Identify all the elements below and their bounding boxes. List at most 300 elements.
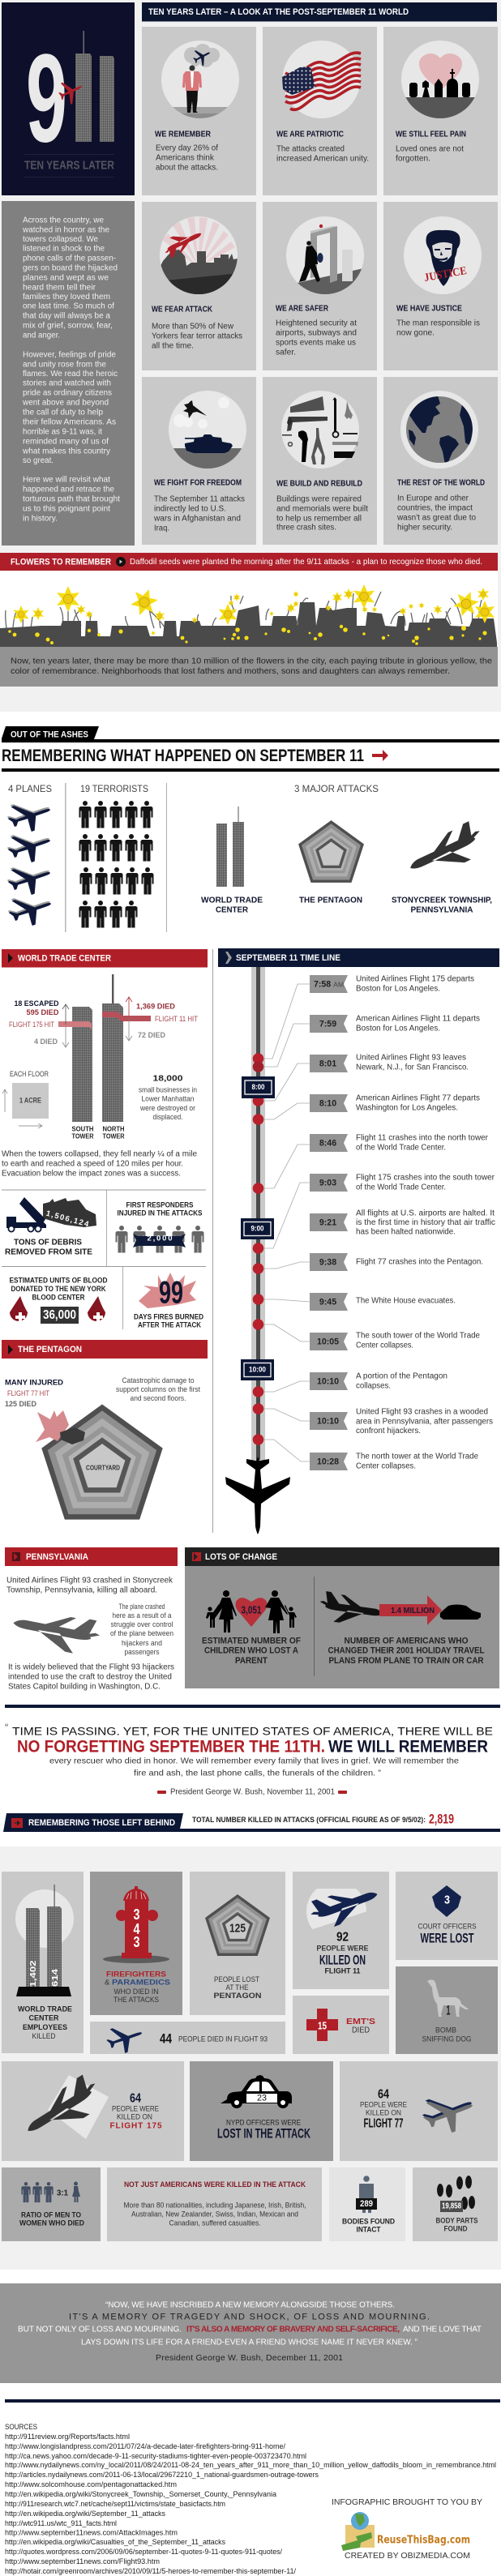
labels: attack sites: THE PENTAGON — [299, 896, 362, 905]
text block: intro narrative: pride as ordinary citizens — [23, 389, 112, 397]
event 10:05: The south tower of the World Trade — [356, 1331, 481, 1341]
chart: towers impact diagram: TOWER — [102, 1133, 125, 1140]
tile: wtc employees: WORLD TRADE — [18, 2005, 73, 2013]
text: the rest of the world — [396, 478, 485, 532]
tile: body parts found: 19,858 — [442, 2202, 461, 2211]
text: we fight for freedom: indirectly led to U.S. — [154, 504, 226, 514]
text block: sources: http://quotes.wordpress.com/2006/09/06/september-11-quotes-9-11-quotes-911-quotes/ — [5, 2548, 282, 2556]
text: holiday travel change — [328, 1636, 485, 1666]
title subtitle: TEN YEARS LATER — [24, 159, 114, 172]
stat: first responders: FIRST RESPONDERS — [126, 1200, 193, 1209]
tile: flight 77 — [340, 2061, 498, 2161]
panel: we remember — [142, 27, 256, 195]
event 8:10 — [310, 1094, 480, 1112]
event 8:10: American Airlines Flight 77 departs — [356, 1094, 480, 1102]
text: we build and rebuild — [276, 480, 368, 532]
tile: bomb sniffing dog — [396, 1966, 498, 2054]
event 10:28: The north tower at the World Trade — [356, 1453, 479, 1461]
stat: tons of debris: REMOVED FROM SITE — [5, 1248, 92, 1256]
stat: small businesses: were destroyed or — [139, 1104, 195, 1112]
text block: intro narrative: the call of duty to help — [23, 409, 104, 417]
panel: 9/11 title — [2, 2, 135, 195]
text block: intro narrative: torturous path that brought — [23, 494, 120, 504]
event 7:59: 7:59 — [319, 1020, 336, 1029]
icon: portrait with justice stamp — [404, 216, 482, 294]
text: we fight for freedom: The September 11 attacks — [154, 494, 245, 504]
event 9:21: is the first time in history that air traffic — [356, 1218, 495, 1227]
tile: flight 11: FLIGHT 11 — [324, 1966, 361, 1976]
quote: george w. bush november 2001: NO FORGETTING SEPTEMBER THE 11TH. — [17, 1738, 325, 1756]
tile: not just americans: Australian, New Zealander, Swiss, Indian, Mexican and — [131, 2210, 298, 2218]
hour marker 10:00: 10:00 — [249, 1365, 266, 1375]
quote: george w. bush november 2001: President George W. Bush, November 11, 2001 — [170, 1788, 335, 1796]
credit: brought to you by: INFOGRAPHIC BROUGHT TO YOU BY — [332, 2497, 482, 2507]
tile: flight 93: PEOPLE DIED IN FLIGHT 93 — [178, 2035, 268, 2044]
stat: small businesses: 18,000 — [152, 1075, 183, 1083]
event 8:46: Flight 11 crashes into the north tower — [356, 1133, 489, 1143]
text: capitol belief: It is widely believed that the Flight 93 hijackers — [8, 1663, 174, 1671]
tile: not just americans: NOT JUST AMERICANS WERE KILLED IN THE ATTACK — [124, 2180, 306, 2189]
icon: red plane — [55, 76, 87, 107]
stat: small businesses — [139, 1075, 197, 1121]
chart: towers impact diagram: TOWER — [71, 1133, 94, 1140]
event 7:59 — [310, 1015, 480, 1033]
text block: flowers remembrance: color of remembrance. Neighborhoods that lost fathers and mothers, sons and daughters can always remember. — [11, 667, 450, 676]
stat: units of blood: ESTIMATED UNITS OF BLOOD — [10, 1276, 108, 1284]
text: we are patriotic: WE ARE PATRIOTIC — [276, 130, 344, 139]
tile: flight 77: 64 — [378, 2088, 389, 2101]
stat: first responders — [115, 1200, 204, 1253]
text: we remember: WE REMEMBER — [155, 130, 211, 139]
quote: george w. bush december 2001 — [0, 2283, 501, 2383]
tile: not just americans — [107, 2167, 322, 2241]
text block: intro narrative: that day will always be a — [23, 311, 111, 321]
text block: sources: http://www.longislandpress.com/2011/07/24/a-decade-later-firefighters-bring-911-home/ — [5, 2442, 285, 2450]
tile: wtc employees: CENTER — [29, 2013, 59, 2023]
labels: attack sites: PENNSYLVANIA — [410, 906, 473, 914]
hour marker 9:00 — [241, 1218, 274, 1239]
stat: first responders: INJURED IN THE ATTACKS — [117, 1208, 203, 1217]
tile: ratio of men to women: WOMEN WHO DIED — [19, 2218, 84, 2227]
icon: american flag — [282, 41, 361, 118]
text block: intro narrative: their fellow Americans. As — [23, 418, 116, 426]
labels: attack sites: CENTER — [216, 906, 249, 914]
text: we still feel pain: Loved ones are not — [396, 144, 464, 154]
text: we are patriotic: The attacks created — [276, 144, 345, 154]
text: we have justice: WE HAVE JUSTICE — [396, 305, 462, 313]
text: the rest of the world: higher security. — [397, 524, 452, 532]
chart: towers impact diagram: 72 DIED — [138, 1031, 165, 1039]
text: we fight for freedom — [153, 478, 245, 533]
event 10:28: Center collapses. — [356, 1462, 416, 1470]
event 10:10 flight 93 — [310, 1407, 493, 1436]
text block: intro narrative: planes and wept as we — [23, 274, 109, 282]
icon: pentagon impact diagram: COURTYARD — [86, 1464, 120, 1472]
tile: wtc employees: EMPLOYEES — [23, 2023, 68, 2032]
tile: bodies found intact: 289 — [360, 2199, 373, 2209]
chart: towers impact diagram: 595 DIED — [26, 1008, 59, 1016]
event 8:01 — [310, 1054, 469, 1072]
logo: reuse this bag — [341, 2512, 470, 2551]
text block: towers collapse: Evacuation below the impact zones was a success. — [2, 1169, 181, 1179]
tile: flight 77: KILLED ON — [366, 2109, 401, 2117]
tile: ratio of men to women: RATIO OF MEN TO — [21, 2210, 81, 2219]
stat: days fires burned: AFTER THE ATTACK — [138, 1320, 201, 1329]
event 10:10 flight 93: area in Pennsylvania, after passengers — [356, 1417, 493, 1427]
panel: september 11 time line — [218, 948, 499, 1534]
quote: george w. bush november 2001: WE WILL REMEMBER — [328, 1738, 488, 1756]
tile: flight 11: KILLED ON — [319, 1952, 366, 1968]
tile: pentagon losses: PENTAGON — [214, 1992, 261, 2000]
event 7:59: Boston for Los Angeles. — [356, 1025, 440, 1033]
panel: three major attacks: 3 MAJOR ATTACKS — [294, 783, 379, 794]
text: the rest of the world: In Europe and other — [397, 494, 469, 503]
diagram: one acre floor — [2, 1070, 49, 1128]
icon: pentagon impact diagram — [36, 1404, 163, 1520]
quote: george w. bush december 2001: IT'S A MEMORY OF TRAGEDY AND SHOCK, OF LOSS AND MOURNING. — [69, 2312, 430, 2321]
text: we build and rebuild: and memorials were built — [276, 504, 368, 514]
tile: emts — [293, 1996, 389, 2054]
stat: small businesses: Lower Manhattan — [141, 1094, 195, 1102]
text block: intro narrative: flames. We read the heroic — [23, 370, 118, 379]
icon: family with heart — [206, 1590, 297, 1633]
labels: attack sites — [201, 896, 492, 914]
event 9:03: Flight 175 crashes into the south tower — [356, 1174, 495, 1182]
event 9:45 — [310, 1293, 456, 1311]
icon: pennsylvania plane — [9, 1605, 103, 1658]
event 8:01: United Airlines Flight 93 leaves — [356, 1054, 466, 1062]
stat: first responders: 2,000 — [148, 1234, 172, 1243]
chart: towers impact diagram: 1,369 DIED — [136, 1002, 175, 1012]
title subtitle — [24, 154, 114, 178]
hour marker 10:00 — [241, 1359, 274, 1380]
icon: pentagon — [298, 820, 364, 883]
panel: world trade center — [2, 949, 208, 1329]
icon: tools — [281, 391, 359, 469]
chart: towers impact diagram: 18 ESCAPED — [15, 999, 59, 1008]
event 9:38 — [310, 1253, 483, 1271]
text block: sources — [5, 2423, 496, 2575]
heading: lots of change: LOTS OF CHANGE — [205, 1552, 277, 1562]
tile: body parts found: BODY PARTS — [436, 2216, 478, 2224]
text block: sources: http://www.solcomhouse.com/pentagonattacked.htm — [5, 2480, 177, 2488]
panel: lots of change — [185, 1547, 499, 1688]
tile: wtc employees — [2, 1872, 84, 2053]
text block: intro narrative: and anger. — [23, 331, 60, 340]
text block: intro narrative: horrible as 9-11 was, it — [23, 428, 102, 436]
heading: remembering those left behind: REMEMBERING THOSE LEFT BEHIND — [28, 1818, 175, 1828]
tile: flight 77: PEOPLE WERE — [360, 2101, 407, 2109]
text block: sources: http://en.wikipedia.org/wiki/Stonycreek_Township,_Somerset_County,_Pennsylvania — [5, 2490, 277, 2498]
tile: firefighters and paramedics: FIREFIGHTERS — [106, 1970, 166, 1979]
event 10:05: 10:05 — [317, 1337, 339, 1347]
labels: pentagon casualties: 125 DIED — [5, 1400, 36, 1408]
stat: units of blood: DONATED TO THE NEW YORK — [11, 1284, 106, 1293]
text: we still feel pain: forgotten. — [396, 154, 430, 164]
text block: intro narrative: gers on board the hijacked — [23, 264, 118, 272]
text: we remember — [155, 130, 218, 172]
quote: george w. bush december 2001: LAYS DOWN ITS LIFE FOR A FRIEND-EVEN A FRIEND WHOSE NAME IT NEVER KNEW. ” — [81, 2338, 418, 2347]
heading: pennsylvania — [5, 1547, 178, 1566]
event 10:10 pentagon — [310, 1371, 447, 1391]
event 9:38: 9:38 — [319, 1258, 336, 1268]
icon: heart and gravestones — [401, 41, 479, 122]
logo: reuse this bag: ReuseThisBag.com — [377, 2534, 470, 2547]
text block: intro narrative: went above and beyond — [22, 399, 109, 407]
text: we are safer: WE ARE SAFER — [276, 305, 328, 313]
event 8:46: 8:46 — [319, 1138, 336, 1148]
text: we are safer: airports, subways and — [276, 329, 357, 337]
text block: intro narrative: However, feelings of pride — [23, 350, 117, 360]
tile: firefighters and paramedics — [90, 1872, 182, 2015]
text: pentagon damage: Catastrophic damage to — [122, 1376, 195, 1384]
tile: bodies found intact — [329, 2167, 405, 2241]
text block: intro narrative: in history. — [23, 514, 58, 524]
heading: ten years later bar — [142, 2, 497, 21]
text: we remember: Every day 26% of — [156, 144, 218, 152]
stat: units of blood: 36,000 — [43, 1308, 76, 1322]
event 9:21: 9:21 — [319, 1217, 336, 1227]
panel: we build and rebuild — [263, 377, 377, 545]
tile: nypd officers: NYPD OFFICERS WERE — [226, 2119, 301, 2127]
tile: nypd officers: LOST IN THE ATTACK — [217, 2125, 310, 2142]
text: we build and rebuild: to help us remember all — [276, 514, 362, 524]
tile: court officers: WERE LOST — [420, 1931, 474, 1945]
text block: sources: http://911research.wtc7.net/cache/sept11/victims/state_basicfacts.htm — [5, 2500, 225, 2508]
tile: not just americans: Canadian, suffered casualties. — [169, 2218, 261, 2227]
tile: flight 175: PEOPLE WERE — [112, 2104, 159, 2114]
tile: flight 175 — [2, 2061, 184, 2161]
event 8:10: Washington for Los Angeles. — [356, 1104, 458, 1112]
tile: nypd officers: 23 — [257, 2093, 267, 2103]
hour marker 8:00 — [242, 1076, 275, 1098]
text: struggle over control: passengers — [125, 1648, 160, 1656]
panel: we still feel pain — [383, 27, 498, 195]
tile: ratio of men to women: 3:1 — [57, 2189, 68, 2198]
heading: ten years later bar: TEN YEARS LATER – A LOOK AT THE POST-SEPTEMBER 11 WORLD — [148, 7, 409, 17]
tile: flight 11: 92 — [336, 1931, 349, 1944]
tile: flight 11: PEOPLE WERE — [316, 1944, 368, 1953]
event 9:21: All flights at U.S. airports are halted. It — [356, 1209, 495, 1217]
tile: pentagon losses: PEOPLE LOST — [214, 1975, 259, 1983]
event 9:21 — [310, 1209, 495, 1237]
tile: flight 93: 44 — [160, 2031, 172, 2046]
panel: we are patriotic — [263, 27, 377, 195]
event 10:10 pentagon: collapses. — [356, 1381, 391, 1391]
quote: george w. bush december 2001: AND THE LOVE THAT — [403, 2325, 482, 2334]
text block: intro narrative: watched in horror as the — [22, 225, 110, 235]
stat: days fires burned: 99 — [159, 1276, 183, 1310]
quote: george w. bush december 2001: IT'S ALSO A MEMORY OF BRAVERY AND SELF-SACRIFICE, — [186, 2325, 400, 2334]
event 10:05: Center collapses. — [356, 1341, 413, 1350]
diagram: one acre floor: EACH FLOOR — [10, 1070, 49, 1078]
text block: sources: http://articles.nydailynews.com/2011-06-13/local/29672210_1_national-guardsmen-outrage-towers — [5, 2471, 319, 2479]
tile: flight 175: FLIGHT 175 — [110, 2122, 162, 2130]
event 10:28 — [310, 1453, 479, 1470]
text: struggle over control — [110, 1603, 173, 1656]
text: we are patriotic: increased American unity. — [276, 154, 369, 164]
tile: not just americans: More than 80 nationalities, including Japanese, Irish, British, — [123, 2200, 306, 2210]
tile: bodies found intact: INTACT — [357, 2224, 381, 2234]
heading: flowers to remember bar — [0, 553, 498, 571]
heading: world trade center: WORLD TRADE CENTER — [18, 953, 111, 963]
event 9:03: 9:03 — [319, 1179, 336, 1188]
tile: firefighters and paramedics: THE ATTACKS — [113, 1996, 159, 2004]
stat: small businesses: small businesses in — [139, 1086, 197, 1094]
labels: attack sites: STONYCREEK TOWNSHIP, — [392, 896, 492, 905]
timeline dots — [253, 1053, 263, 1445]
heading: time line — [218, 948, 499, 967]
tile: body parts found — [413, 2167, 498, 2241]
icon: fighter jet and tank — [169, 391, 246, 471]
text block: intro narrative — [2, 201, 135, 546]
text block: intro narrative: so great. — [23, 456, 54, 465]
text block: intro narrative: heard them tell their — [23, 284, 96, 292]
stat: units of blood — [10, 1276, 108, 1324]
dividers — [2, 1190, 206, 1329]
event 10:10 flight 93: United Flight 93 crashes in a wooded — [356, 1407, 488, 1417]
quote: george w. bush november 2001: “ — [5, 1722, 8, 1733]
text block: sources: http://www.september11news.com/AttackImages.htm — [5, 2529, 178, 2537]
heading: remembering those left behind: 2,819 — [429, 1811, 454, 1827]
text block: sources: http://www.september11news.com/Flight93.htm — [5, 2557, 160, 2565]
stat: days fires burned — [134, 1273, 203, 1329]
stat: small businesses: displaced. — [152, 1113, 183, 1121]
text block: sources: http://hotair.com/greenroom/archives/2010/09/11/5-heroes-to-remember-this-september-11/ — [5, 2567, 296, 2575]
text: we build and rebuild: WE BUILD AND REBUILD — [276, 480, 362, 488]
tile: emts: DIED — [352, 2026, 370, 2035]
icon: red arrow — [372, 750, 388, 761]
tile: ratio of men to women — [2, 2167, 101, 2241]
text block: towers collapse — [2, 1149, 198, 1179]
text: we are patriotic — [276, 130, 369, 164]
panel: the rest of the world — [383, 377, 498, 545]
text: we fear attack: all the time. — [152, 342, 194, 350]
icon: plane at end of timeline — [225, 1457, 290, 1534]
text: capitol belief: intended to use the craft to destroy the United — [8, 1673, 172, 1681]
text block: intro narrative: families they loved them — [23, 293, 110, 302]
text: we build and rebuild: three crash sites. — [276, 524, 336, 532]
text: children lost parent: PARENT — [235, 1656, 268, 1666]
heading: time line: SEPTEMBER 11 TIME LINE — [236, 953, 340, 963]
text: struggle over control: here as a result of a — [112, 1611, 172, 1620]
text: we remember: Americans think — [156, 154, 214, 162]
text block: intro narrative: phone calls of the passen- — [23, 255, 116, 263]
text: capitol belief — [8, 1663, 174, 1691]
text block: intro narrative: us to this poignant point — [23, 504, 110, 514]
text block: intro narrative: Across the country, we — [23, 216, 105, 225]
text block: sources: http://ca.news.yahoo.com/decade-9-11-security-stadiums-tighter-even-people-003723470.html — [5, 2452, 306, 2460]
quote: george w. bush december 2001: President George W. Bush, December 11, 2001 — [156, 2353, 343, 2363]
text: flight 93 crash — [6, 1576, 173, 1595]
tile: pentagon losses: AT THE — [225, 1983, 248, 1992]
event 8:46 — [310, 1133, 489, 1153]
text: flight 93 crash: United Airlines Flight 93 crashed in Stonycreek — [6, 1576, 173, 1585]
tile: bodies found intact: BODIES FOUND — [342, 2216, 395, 2226]
tile: flight 11 — [293, 1872, 389, 1989]
event 8:01: Newark, N.J., for San Francisco. — [356, 1063, 469, 1072]
text: struggle over control: hijackers and — [122, 1639, 162, 1647]
tile: bomb sniffing dog: SNIFFING DOG — [422, 2035, 472, 2044]
text: we remember: about the attacks. — [156, 164, 218, 172]
text block: intro narrative: reminded many of us of — [23, 438, 109, 446]
tile: bomb sniffing dog: 1 — [446, 2002, 451, 2018]
text block: sources: http://wtc911.us/wtc_911_facts.html — [5, 2519, 117, 2527]
tile: wtc employees: 614 — [50, 1969, 60, 1987]
icon: twin towers as 11 — [75, 31, 114, 142]
heading: remembering those left behind: TOTAL NUMBER KILLED IN ATTACKS (OFFICIAL FIGURE AS OF 9/5/02): — [192, 1816, 426, 1824]
icon: stonycreek plane — [403, 819, 489, 884]
text: pentagon damage — [116, 1376, 200, 1402]
icon: city skyline with plane — [158, 216, 240, 297]
text: capitol belief: States Capitol building in Washington, D.C. — [8, 1683, 161, 1691]
tile: emts: 15 — [318, 2020, 327, 2031]
heading: flowers to remember bar: FLOWERS TO REMEMBER — [11, 558, 111, 567]
text block: sources: http://www.nydailynews.com/ny_local/2011/08/24/2011-08-24_ten_years_after_911_more_than_10_million_yellow_daffodils_bloom_in_remembrance.html — [5, 2461, 496, 2469]
text: we fear attack: Yorkers fear terror attacks — [152, 332, 242, 340]
text: children lost parent: CHILDREN WHO LOST A — [204, 1645, 298, 1655]
credit: brought to you by: CREATED BY OBIZMEDIA.COM — [345, 2551, 470, 2561]
panel: nineteen terrorists — [79, 783, 167, 932]
chart: towers impact diagram — [9, 974, 198, 1140]
icon: security scanner — [286, 216, 364, 294]
tile: court officers: COURT OFFICERS — [418, 1923, 477, 1931]
chart: towers impact diagram: SOUTH — [71, 1125, 94, 1133]
text: the rest of the world: wasn't as great due to — [396, 514, 477, 522]
panel: we fear attack — [142, 202, 256, 370]
event 7:58 — [310, 974, 474, 994]
panel: nineteen terrorists: 19 TERRORISTS — [80, 783, 148, 794]
text block: towers collapse: When the towers collapsed, they fell nearly ¼ of a mile — [2, 1149, 198, 1159]
icon: globe — [400, 391, 478, 469]
text: we fight for freedom: Iraq. — [154, 524, 169, 533]
chart: towers impact diagram: FLIGHT 175 HIT — [9, 1021, 54, 1029]
text block: flowers remembrance: Now, ten years later, there may be more than 10 million of the flowers in the city, each paying tribute in glorious yellow, the — [11, 657, 492, 666]
quote: george w. bush december 2001: “NOW, WE HAVE INSCRIBED A NEW MEMORY ALONGSIDE THOSE OTHERS. — [105, 2300, 395, 2310]
labels: pentagon casualties — [5, 1378, 63, 1408]
tile: flight 93 — [90, 2021, 285, 2056]
heading: world trade center — [2, 949, 208, 968]
event 8:10: 8:10 — [319, 1099, 336, 1109]
heading: out of the ashes — [2, 726, 499, 742]
heading: flowers to remember bar: Daffodil seeds were planted the morning after the 9/11 attacks - a plan to recognize those who died. — [130, 558, 482, 567]
text block: towers collapse: to earth and reached a speed of 120 miles per hour. — [2, 1159, 183, 1169]
event 7:59: American Airlines Flight 11 departs — [356, 1015, 480, 1023]
heading: pennsylvania: PENNSYLVANIA — [26, 1552, 88, 1562]
tile: firefighters and paramedics: WHO DIED IN — [113, 1988, 159, 1996]
event 10:10 pentagon: A portion of the Pentagon — [356, 1371, 447, 1381]
text: we are safer: sports events make us — [276, 339, 356, 347]
title numeral 9: 9 — [26, 28, 67, 169]
chart: towers impact diagram: FLIGHT 11 HIT — [155, 1015, 198, 1023]
panel: we fight for freedom — [142, 377, 256, 545]
icon: world trade center — [216, 807, 244, 887]
text: we fear attack — [152, 305, 242, 350]
text: we build and rebuild: Buildings were repaired — [276, 494, 362, 504]
heading: remembering what happened: REMEMBERING WHAT HAPPENED ON SEPTEMBER 11 — [2, 746, 364, 765]
event 9:03: of the World Trade Center. — [356, 1183, 446, 1192]
text: struggle over control: of the plane between — [110, 1629, 173, 1637]
text: pentagon damage: support columns on the first — [116, 1385, 200, 1393]
tile: bomb sniffing dog: BOMB — [435, 2026, 456, 2035]
tile: firefighters and paramedics: 3 — [133, 1906, 139, 1923]
text block: intro narrative: what makes this country — [22, 447, 110, 456]
text: holiday travel change: PLANS FROM PLANE TO TRAIN OR CAR — [329, 1656, 484, 1666]
event 10:10 flight 93: 10:10 — [317, 1417, 339, 1427]
tile: firefighters and paramedics: PARAMEDICS — [112, 1978, 170, 1988]
heading: lots of change — [185, 1547, 499, 1566]
timeline spine — [251, 967, 265, 1460]
